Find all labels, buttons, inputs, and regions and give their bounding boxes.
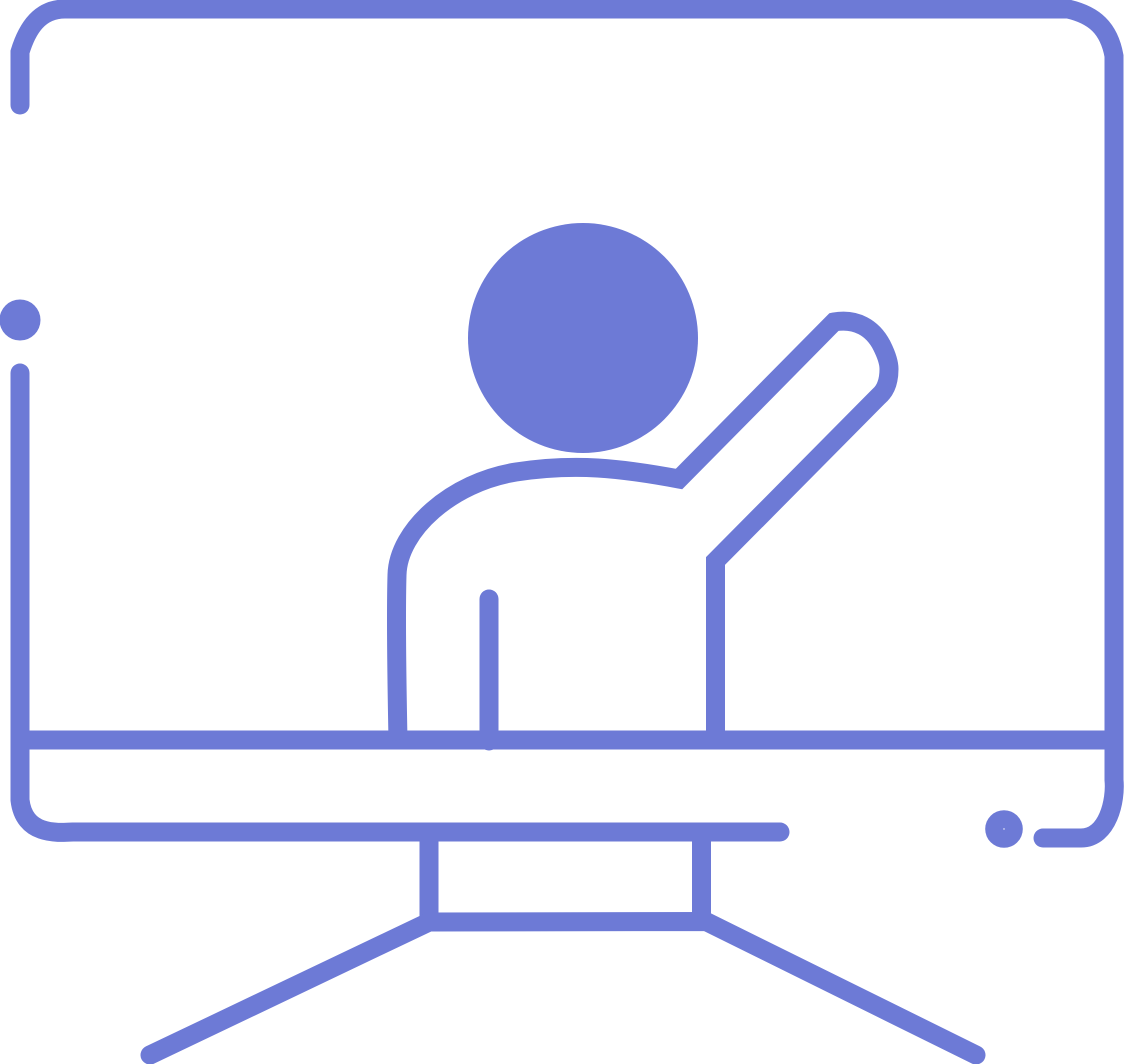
person head <box>468 223 698 453</box>
person torso line <box>480 599 498 741</box>
monitor stand neck <box>429 832 702 921</box>
monitor outline top and right <box>20 9 1114 838</box>
monitor outline left and bottom <box>20 373 780 832</box>
dot on left bezel <box>0 300 40 340</box>
person body with raised arm <box>397 321 889 740</box>
monitor stand base <box>150 922 976 1055</box>
power button <box>985 810 1023 848</box>
screen bottom line <box>20 730 1114 750</box>
